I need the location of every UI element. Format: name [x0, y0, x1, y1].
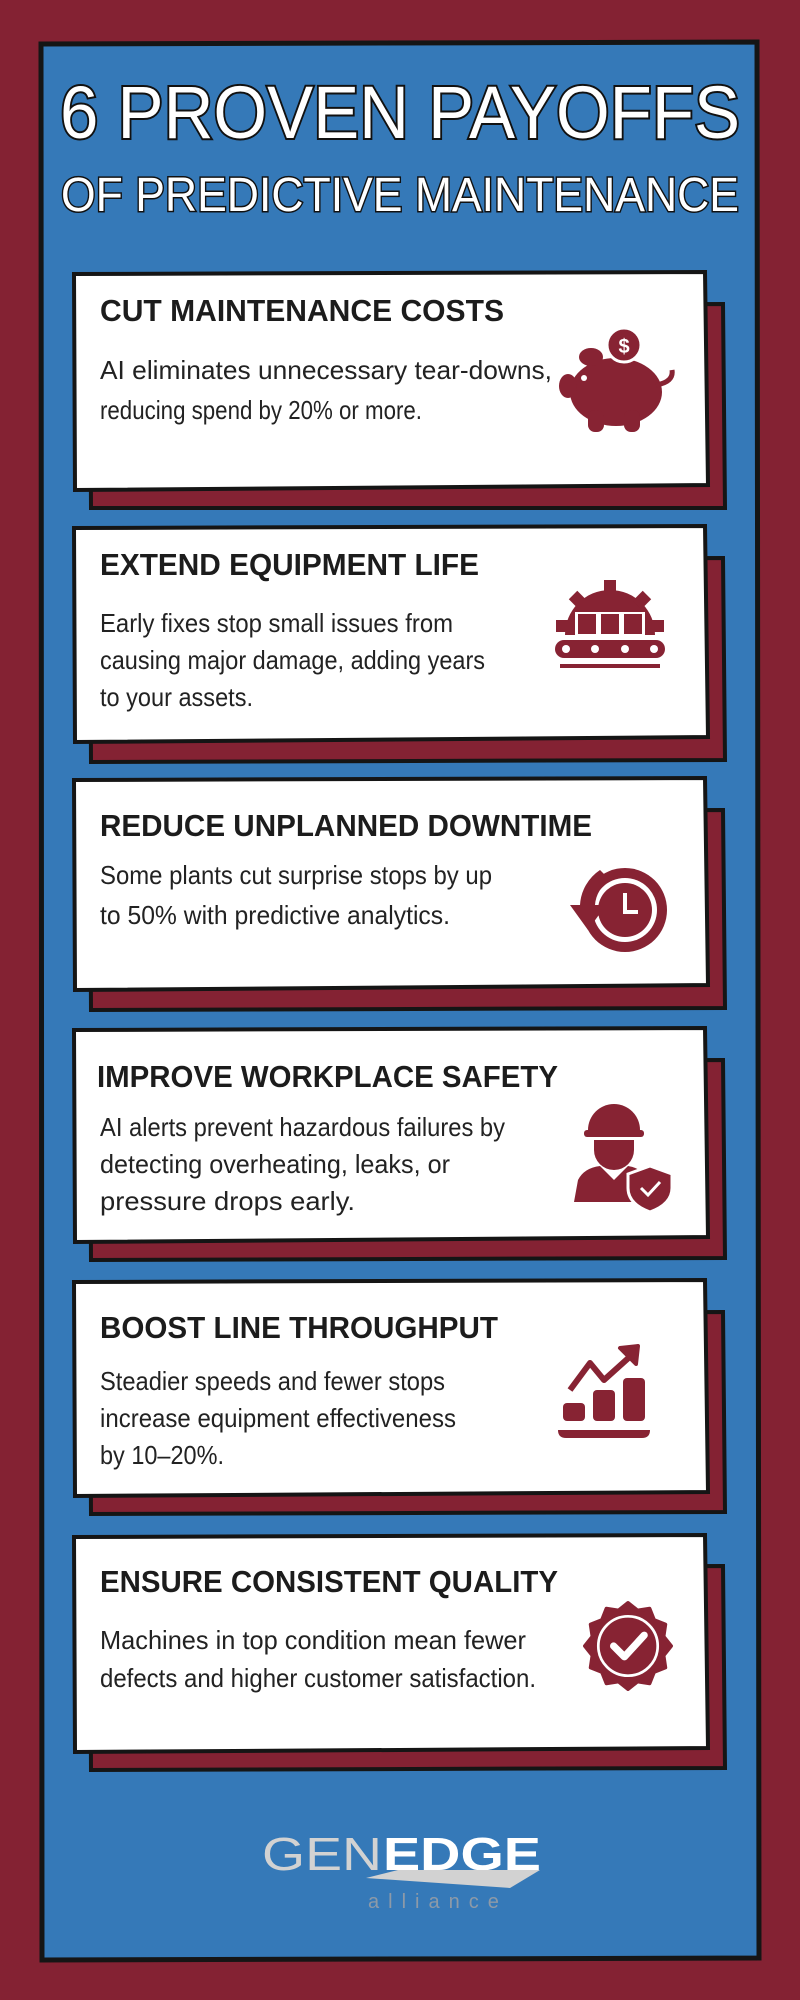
panel: ensure consistent quality: Machines in top condition mean fewer	[100, 1625, 526, 1655]
logo: GenEdge alliance: EDGE	[383, 1828, 541, 1880]
panel: boost line throughput: increase equipment effectiveness	[100, 1403, 456, 1433]
panel: ensure consistent quality: ENSURE CONSISTENT QUALITY	[100, 1564, 558, 1599]
icon: piggy bank	[559, 328, 672, 432]
panel: reduce unplanned downtime: REDUCE UNPLANNED DOWNTIME	[100, 808, 592, 843]
panel: extend equipment life: EXTEND EQUIPMENT LIFE	[100, 547, 479, 582]
title: OF PREDICTIVE MAINTENANCE	[61, 169, 739, 222]
title: 6 PROVEN PAYOFFS	[60, 71, 740, 154]
panel: reduce unplanned downtime: to 50% with predictive analytics.	[100, 900, 450, 930]
panel: cut maintenance costs: CUT MAINTENANCE COSTS	[100, 293, 504, 328]
icon: quality badge	[585, 1603, 671, 1689]
panel: ensure consistent quality	[74, 1535, 725, 1770]
icon: bar chart with arrow	[558, 1346, 650, 1438]
logo: GenEdge alliance: alliance	[368, 1891, 508, 1913]
panel: improve workplace safety: pressure drops early.	[100, 1186, 355, 1216]
panel: boost line throughput: BOOST LINE THROUGHPUT	[100, 1310, 498, 1345]
panel: ensure consistent quality: defects and higher customer satisfaction.	[100, 1663, 536, 1693]
panel: cut maintenance costs: reducing spend by 20% or more.	[100, 395, 422, 425]
panel: improve workplace safety	[74, 1028, 725, 1260]
panel: improve workplace safety: detecting overheating, leaks, or	[100, 1149, 450, 1179]
panel: reduce unplanned downtime: Some plants cut surprise stops by up	[100, 860, 492, 890]
panel: cut maintenance costs: AI eliminates unnecessary tear-downs,	[100, 355, 552, 385]
panel: extend equipment life: Early fixes stop small issues from	[100, 608, 453, 638]
panel: boost line throughput	[74, 1280, 725, 1514]
panel: extend equipment life	[74, 526, 725, 762]
title	[60, 71, 740, 222]
panel: improve workplace safety: AI alerts prevent hazardous failures by	[100, 1112, 505, 1142]
icon: gear conveyor	[555, 580, 665, 668]
icon: piggy bank: $	[618, 336, 630, 358]
panel: improve workplace safety: IMPROVE WORKPLACE SAFETY	[97, 1059, 558, 1094]
panel: extend equipment life: causing major damage, adding years	[100, 645, 485, 675]
logo: GenEdge alliance: GEN	[262, 1828, 382, 1880]
panel: cut maintenance costs	[74, 272, 725, 508]
icon: worker with shield	[574, 1104, 672, 1212]
icon: clock with arrow	[570, 868, 667, 952]
panel: reduce unplanned downtime	[74, 778, 725, 1010]
panel: boost line throughput: by 10–20%.	[100, 1440, 224, 1470]
logo: GenEdge alliance	[262, 1828, 541, 1913]
panel: extend equipment life: to your assets.	[100, 682, 253, 712]
panel: boost line throughput: Steadier speeds and fewer stops	[100, 1366, 445, 1396]
